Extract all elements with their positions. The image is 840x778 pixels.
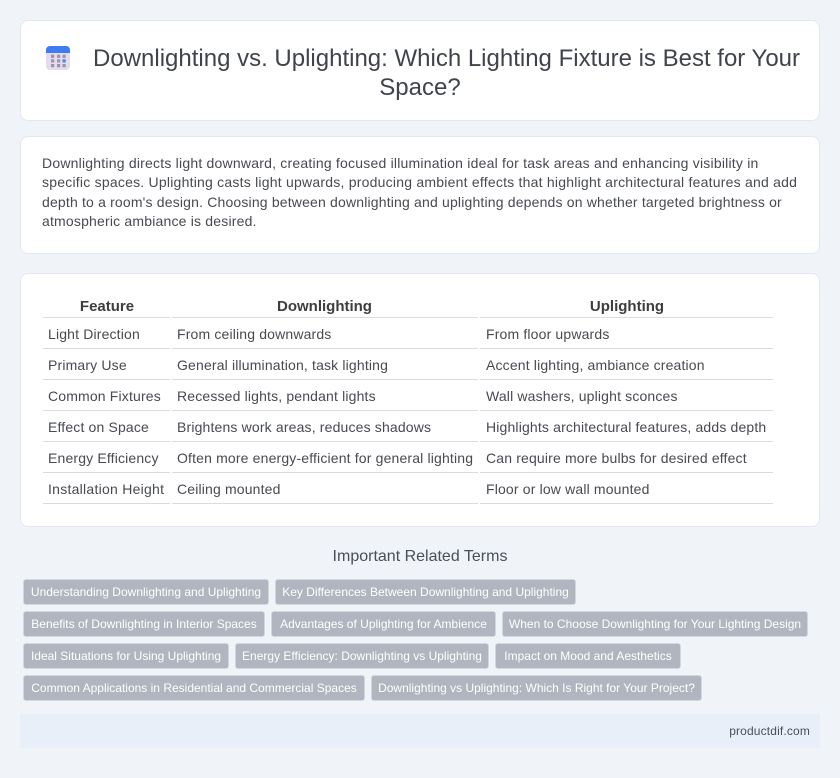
tag: Downlighting vs Uplighting: Which Is Right for Your Project?	[378, 681, 695, 695]
tag: Benefits of Downlighting in Interior Spaces	[31, 617, 257, 631]
row: effect on space: Effect on Space	[48, 419, 149, 435]
header row	[80, 298, 664, 315]
intro text: Downlighting directs light downward, creating focused illumination ideal for task areas and enhancing visibility in	[42, 155, 759, 171]
tag: Impact on Mood and Aesthetics	[504, 649, 672, 663]
header row: Feature	[80, 298, 134, 315]
row: effect on space: Highlights architectural features, adds depth	[486, 419, 766, 435]
row: energy efficiency	[48, 450, 747, 466]
row: installation height: Ceiling mounted	[177, 481, 281, 497]
intro text	[42, 155, 797, 229]
panel: title header	[20, 20, 820, 121]
row: primary use: General illumination, task lighting	[177, 357, 388, 373]
tag: When to Choose Downlighting for Your Lighting Design	[509, 617, 801, 631]
tag	[371, 675, 702, 701]
panel: introduction	[20, 136, 820, 254]
table	[43, 298, 773, 504]
row: light direction	[48, 326, 609, 342]
title: Space?	[379, 74, 461, 101]
header row: Uplighting	[590, 298, 664, 315]
row: installation height: Installation Height	[48, 481, 164, 497]
intro text: specific spaces. Uplighting casts light upwards, producing ambient effects that highlight architectural features and add	[42, 174, 797, 190]
title: Downlighting vs. Uplighting: Which Lighting Fixture is Best for Your	[93, 45, 800, 72]
tag	[23, 643, 229, 669]
row: installation height: Floor or low wall mounted	[486, 481, 650, 497]
tag	[271, 611, 496, 637]
heading: important related terms: Important Related Terms	[333, 548, 507, 565]
row: effect on space	[48, 419, 766, 435]
icon: calendar	[46, 46, 70, 70]
tag	[235, 643, 489, 669]
panel: comparison table	[20, 273, 820, 527]
footer source: productdif.com	[729, 724, 810, 738]
row: light direction: Light Direction	[48, 326, 140, 342]
row: energy efficiency: Can require more bulbs for desired effect	[486, 450, 747, 466]
related terms tags	[23, 579, 808, 701]
row: common fixtures: Common Fixtures	[48, 388, 161, 404]
tag: Advantages of Uplighting for Ambience	[280, 617, 487, 631]
tag	[23, 579, 269, 605]
header row: Downlighting	[277, 298, 372, 315]
tag	[495, 643, 681, 669]
row: primary use: Accent lighting, ambiance creation	[486, 357, 705, 373]
row: primary use: Primary Use	[48, 357, 127, 373]
tag: Energy Efficiency: Downlighting vs Uplighting	[242, 649, 482, 663]
tag	[23, 611, 265, 637]
row: light direction: From ceiling downwards	[177, 326, 331, 342]
tag: Key Differences Between Downlighting and Uplighting	[282, 585, 569, 599]
tag: Ideal Situations for Using Uplighting	[31, 649, 221, 663]
intro text: depth to a room's design. Choosing between downlighting and uplighting depends on whether targeted brightness or	[42, 194, 782, 210]
tag	[502, 611, 808, 637]
row: light direction: From floor upwards	[486, 326, 609, 342]
row: common fixtures	[48, 388, 678, 404]
row: energy efficiency: Often more energy-efficient for general lighting	[177, 450, 473, 466]
tag: Common Applications in Residential and Commercial Spaces	[31, 681, 357, 695]
tag	[275, 579, 576, 605]
row: common fixtures: Recessed lights, pendant lights	[177, 388, 376, 404]
row: effect on space: Brightens work areas, reduces shadows	[177, 419, 431, 435]
row: primary use	[48, 357, 705, 373]
title	[93, 45, 800, 101]
row: installation height	[48, 481, 650, 497]
row: energy efficiency: Energy Efficiency	[48, 450, 159, 466]
tag	[23, 675, 365, 701]
intro text: atmospheric ambiance is desired.	[42, 213, 257, 229]
tag: Understanding Downlighting and Uplighting	[31, 585, 261, 599]
footer bar	[20, 714, 820, 748]
row: common fixtures: Wall washers, uplight sconces	[486, 388, 678, 404]
